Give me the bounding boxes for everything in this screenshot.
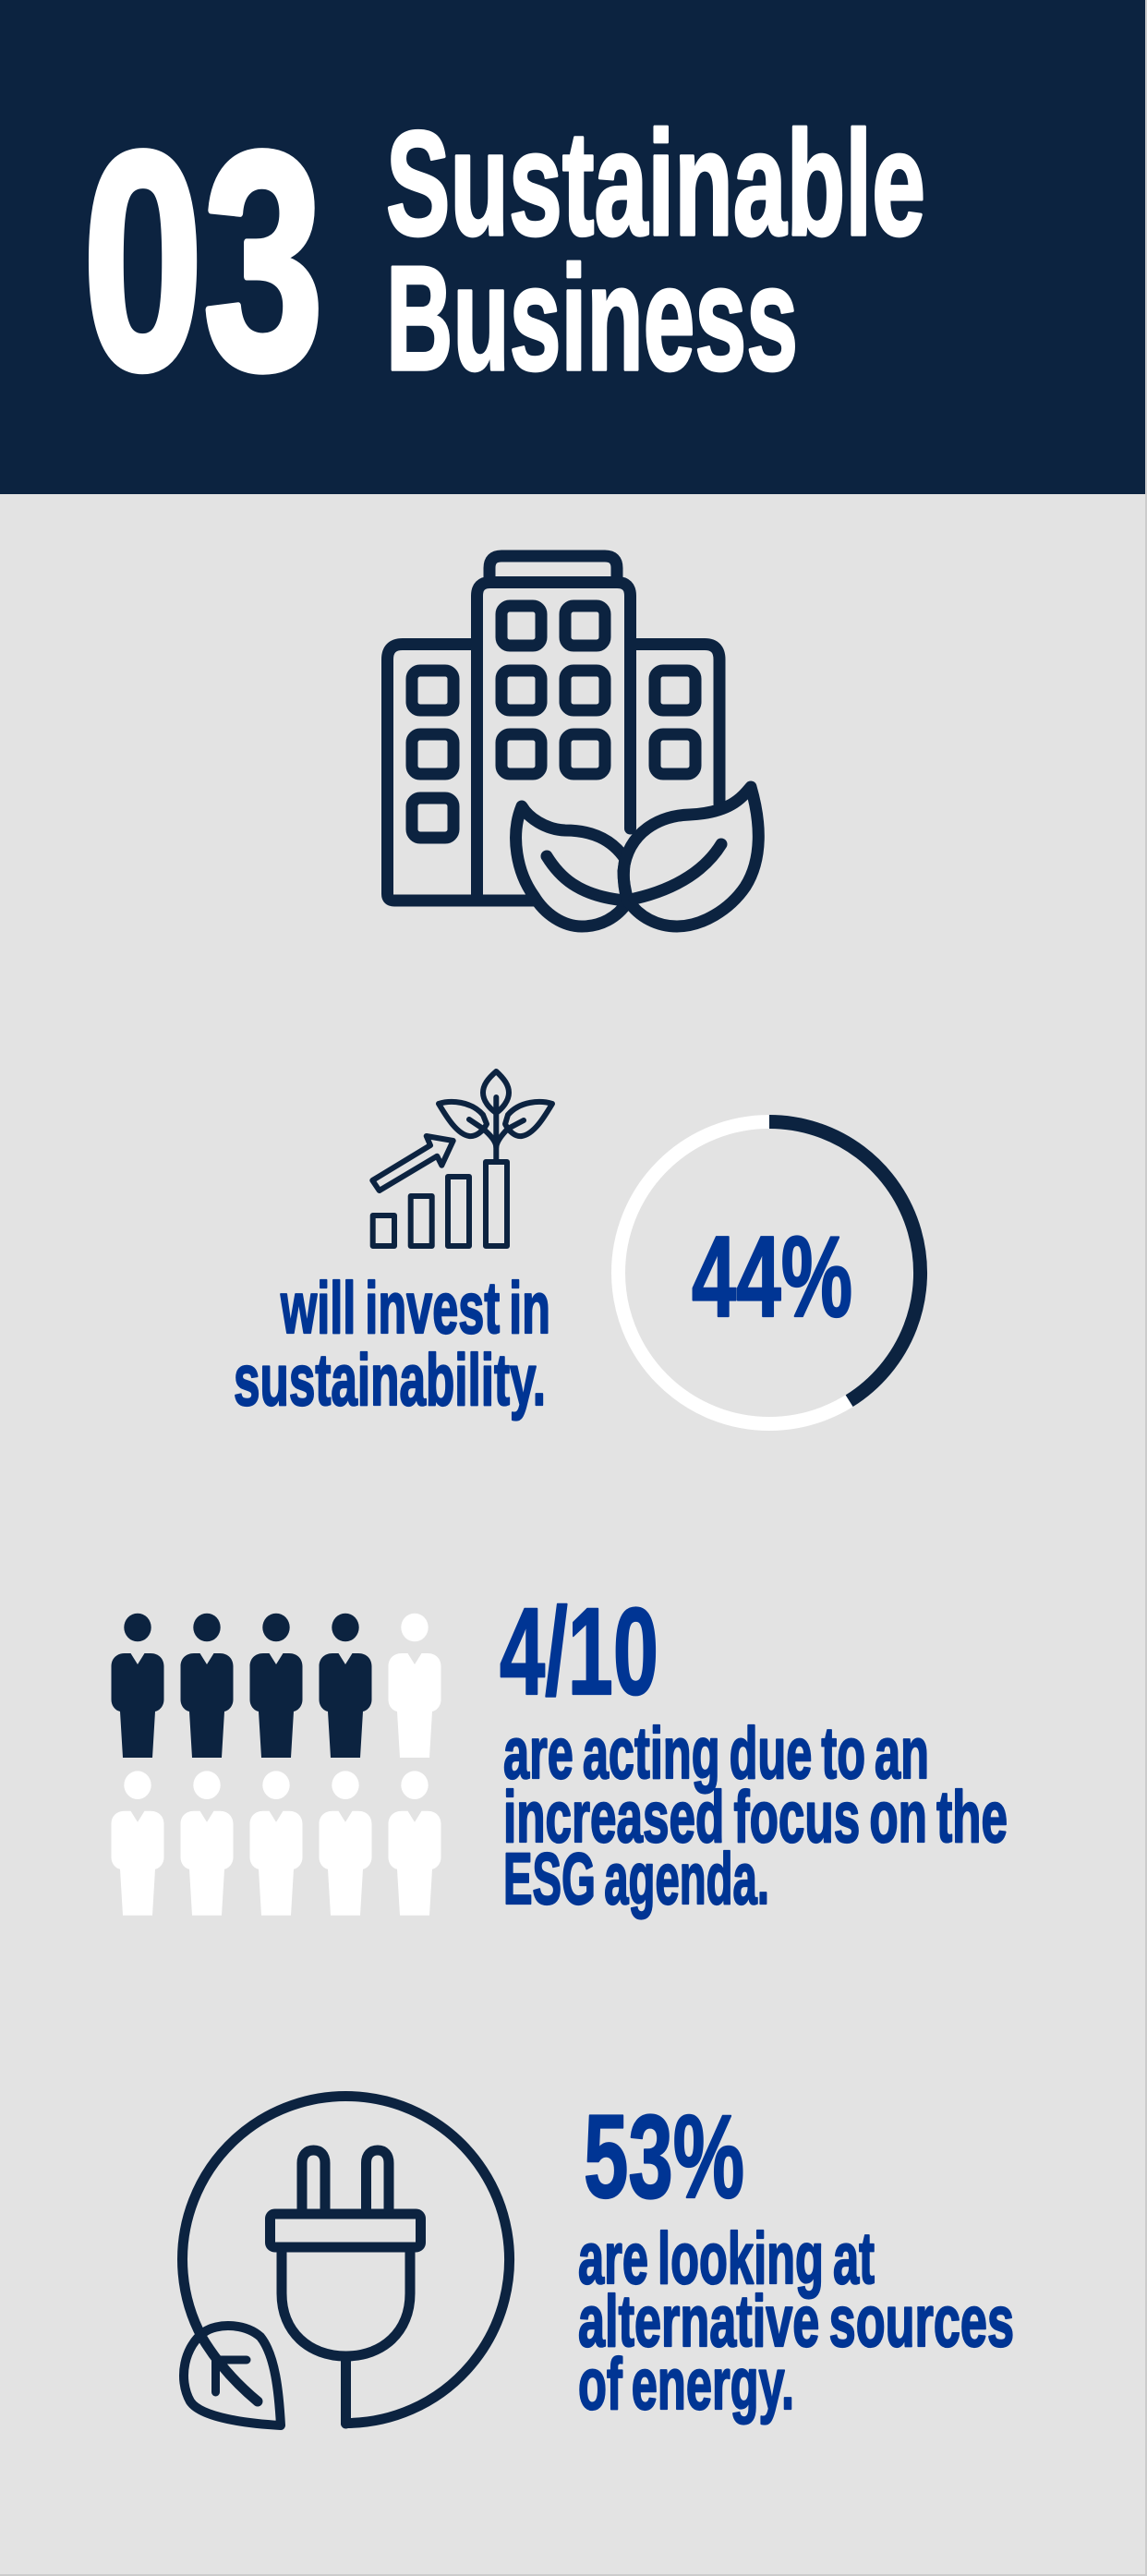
panel: 53% energy	[183, 2091, 1014, 2425]
header band	[0, 0, 1145, 494]
donut value: 44%	[692, 1214, 852, 1341]
label text: will invest in	[280, 1266, 550, 1348]
right leaf	[623, 787, 758, 926]
icon: office buildings with leaves	[388, 556, 758, 926]
stat value: 4/10	[500, 1583, 658, 1721]
stat description: ESG agenda.	[503, 1837, 769, 1919]
pictogram: ten people	[111, 1614, 441, 1916]
stat description: of energy.	[578, 2342, 794, 2425]
stat description	[503, 1711, 1008, 1919]
left leaf	[516, 806, 628, 926]
donut chart	[619, 1121, 921, 1424]
title: Business	[386, 236, 798, 402]
icon: plug in circle with leaf	[183, 2097, 510, 2425]
icon: growth bars with plant	[372, 1071, 552, 1246]
stat value: 53%	[584, 2091, 744, 2223]
stat description: are looking at	[578, 2217, 875, 2299]
section number: 03	[83, 88, 323, 433]
label text: sustainability.	[234, 1338, 546, 1421]
panel: 44% invest in sustainability	[234, 1071, 921, 1424]
stat description	[578, 2217, 1014, 2425]
panel: 4 of 10	[111, 1583, 1008, 1919]
title	[386, 101, 925, 402]
label text	[234, 1266, 550, 1421]
